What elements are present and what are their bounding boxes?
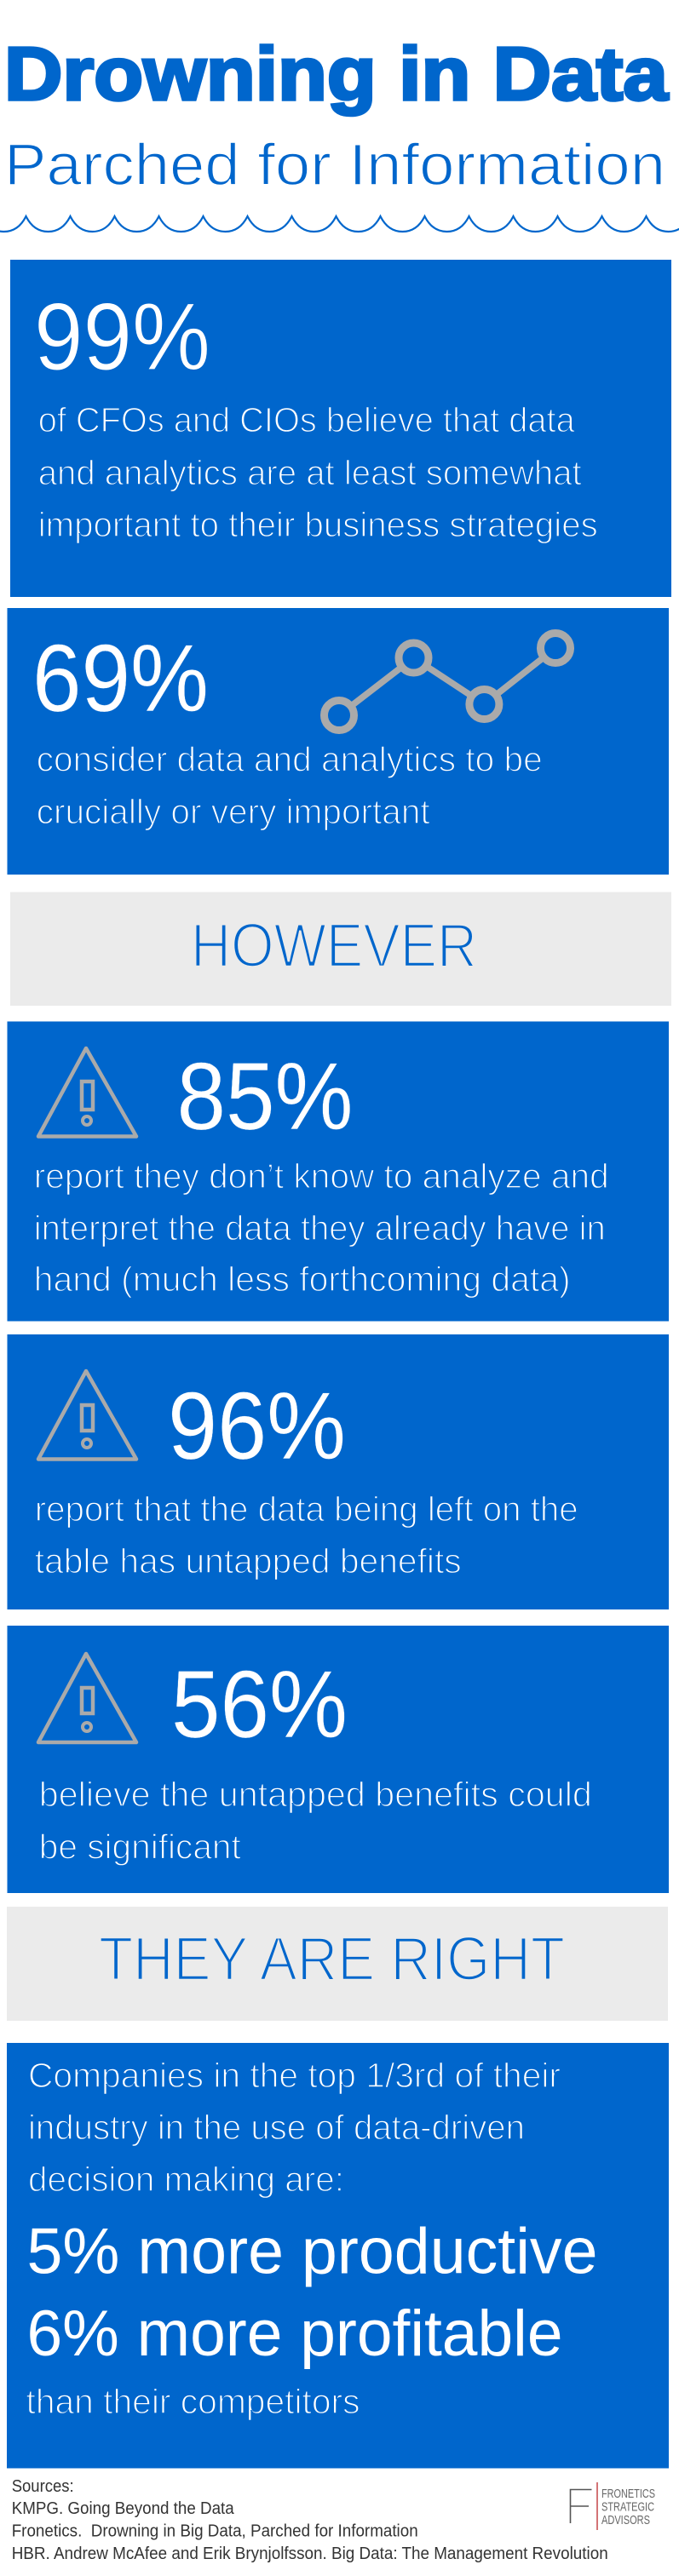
text: companies intro: decision making are: xyxy=(28,2160,344,2199)
panel: 69% stat xyxy=(7,608,669,875)
text: companies intro xyxy=(28,2056,561,2199)
subtitle: Parched for Information xyxy=(4,132,665,198)
stat: 6% more profitable: 6% more profitable xyxy=(27,2298,562,2370)
icon: warning triangle xyxy=(38,1371,136,1460)
heading: they are right: THEY ARE RIGHT xyxy=(99,1925,565,1994)
icon: warning triangle xyxy=(38,1048,136,1136)
panel: 56% stat xyxy=(7,1626,669,1893)
sources: Fronetics. Drowning in Big Data, Parched for Information xyxy=(12,2522,418,2541)
text: don't know to analyze: report they don’t know to analyze and xyxy=(34,1156,609,1196)
panel: top third companies xyxy=(7,2043,669,2468)
title: Drowning in Data xyxy=(4,32,669,116)
text: than their competitors: than their competitors xyxy=(26,2382,360,2421)
text: crucially important xyxy=(37,739,543,831)
text: CFOs and CIOs: and analytics are at least somewhat xyxy=(38,453,582,492)
stat: 96%: 96% xyxy=(168,1373,346,1479)
text: CFOs and CIOs: of CFOs and CIOs believe that data xyxy=(38,400,575,439)
sources xyxy=(12,2477,608,2563)
text: significant benefits: be significant xyxy=(39,1827,241,1867)
stat: 85%: 85% xyxy=(177,1043,353,1150)
icon: warning triangle xyxy=(38,1654,136,1742)
text: companies intro: Companies in the top 1/3rd of their xyxy=(28,2056,561,2095)
text: significant benefits xyxy=(39,1775,592,1867)
stat: 99%: 99% xyxy=(34,284,210,390)
sources: Sources: xyxy=(12,2477,74,2496)
stat: 69%: 69% xyxy=(32,625,209,731)
text: don't know to analyze: interpret the data they already have in xyxy=(34,1208,606,1248)
heading: however: HOWEVER xyxy=(191,912,477,980)
logo: Fronetics Strategic Advisors: STRATEGIC xyxy=(601,2500,654,2514)
logo: Fronetics Strategic Advisors: FRONETICS xyxy=(601,2487,655,2501)
stat: 56%: 56% xyxy=(171,1651,348,1758)
panel: 96% stat xyxy=(7,1334,669,1609)
text: CFOs and CIOs xyxy=(38,400,598,544)
logo: Fronetics Strategic Advisors xyxy=(571,2482,655,2530)
text: crucially important: consider data and analytics to be xyxy=(37,739,543,778)
text: don't know to analyze: hand (much less forthcoming data) xyxy=(34,1259,571,1299)
panel: 85% stat xyxy=(7,1022,669,1322)
logo: Fronetics Strategic Advisors: ADVISORS xyxy=(601,2514,650,2527)
wave divider xyxy=(0,216,679,232)
text: untapped benefits: report that the data being left on the xyxy=(35,1489,578,1529)
icon: line chart xyxy=(324,634,571,731)
text: CFOs and CIOs: important to their business strategies xyxy=(38,505,598,544)
text: significant benefits: believe the untapped benefits could xyxy=(39,1775,592,1814)
panel: 99% stat xyxy=(10,260,671,597)
text: untapped benefits: table has untapped benefits xyxy=(35,1541,462,1581)
sources: HBR. Andrew McAfee and Erik Brynjolfsson. Big Data: The Management Revolution xyxy=(12,2544,608,2563)
text: untapped benefits xyxy=(35,1489,578,1581)
text: crucially important: crucially or very important xyxy=(37,792,430,831)
text: don't know to analyze xyxy=(34,1156,609,1299)
banner: they are right xyxy=(7,1907,668,2021)
banner: however xyxy=(10,892,671,1006)
text: companies intro: industry in the use of data-driven xyxy=(28,2108,525,2147)
sources: KMPG. Going Beyond the Data xyxy=(12,2499,235,2518)
stat: 5% more productive: 5% more productive xyxy=(27,2216,598,2287)
